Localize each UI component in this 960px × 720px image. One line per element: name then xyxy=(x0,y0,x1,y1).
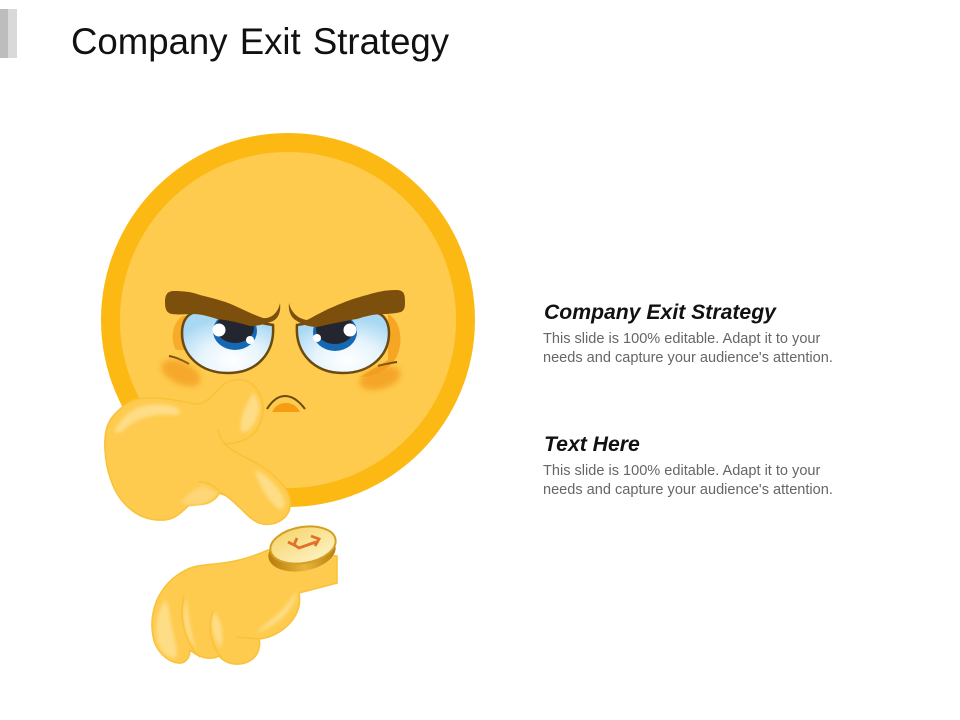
upper hand covering mouth xyxy=(105,380,290,524)
left eye xyxy=(169,312,273,373)
mouth xyxy=(267,396,305,412)
watch arrows xyxy=(288,536,319,548)
right cheek xyxy=(357,362,403,394)
right eyebrow xyxy=(289,290,405,327)
text block: text here: needs and capture your audience's attention. xyxy=(543,482,833,498)
text block: text here: Text Here xyxy=(544,433,640,456)
text block: company exit strategy xyxy=(543,301,833,366)
text block: company exit strategy: This slide is 100% editable. Adapt it to your xyxy=(543,331,821,347)
right eye xyxy=(297,312,400,377)
left cheek xyxy=(157,354,205,392)
lower hand with wrist xyxy=(152,550,337,664)
text block: company exit strategy: needs and capture your audience's attention. xyxy=(543,350,833,366)
wrist watch xyxy=(265,522,339,577)
title: Company Exit Strategy xyxy=(71,21,450,62)
text block: text here xyxy=(543,433,833,498)
face xyxy=(101,133,475,507)
emoji illustration xyxy=(101,133,475,664)
decorative corner tab xyxy=(0,9,17,58)
left eyebrow xyxy=(165,291,280,326)
text block: text here: This slide is 100% editable. Adapt it to your xyxy=(543,463,821,479)
text block: company exit strategy: Company Exit Strategy xyxy=(544,301,777,324)
